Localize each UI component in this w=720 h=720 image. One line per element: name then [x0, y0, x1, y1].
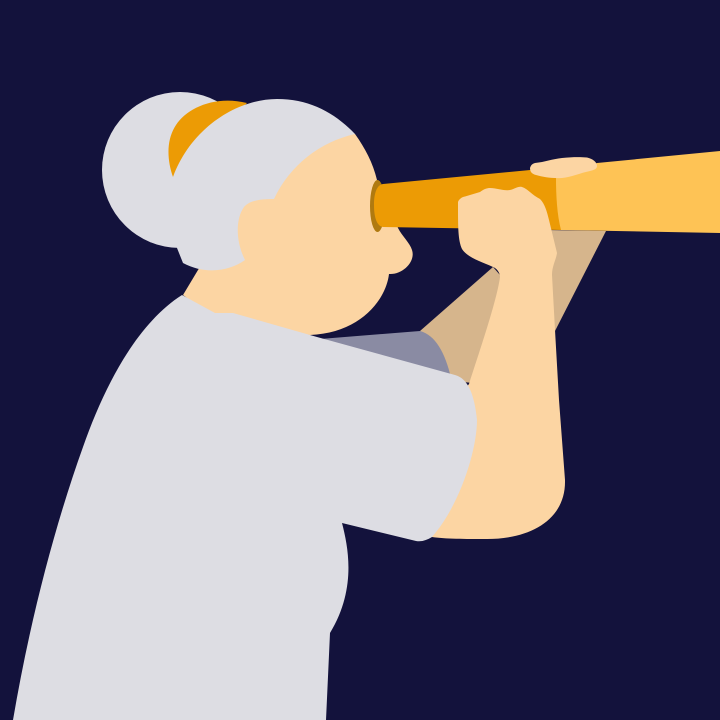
telescope small tube — [374, 167, 562, 230]
hair band — [168, 101, 247, 177]
far arm in shadow — [420, 230, 606, 384]
far sleeve — [320, 331, 451, 378]
hair front — [173, 99, 355, 270]
hair bun — [102, 92, 258, 248]
telescope large tube — [556, 151, 720, 233]
head and neck — [183, 125, 413, 335]
upper fingers on telescope — [530, 157, 597, 178]
near forearm and hand — [432, 187, 565, 539]
telescope eyepiece rim — [370, 180, 385, 232]
shirt body and sleeve — [13, 295, 477, 720]
